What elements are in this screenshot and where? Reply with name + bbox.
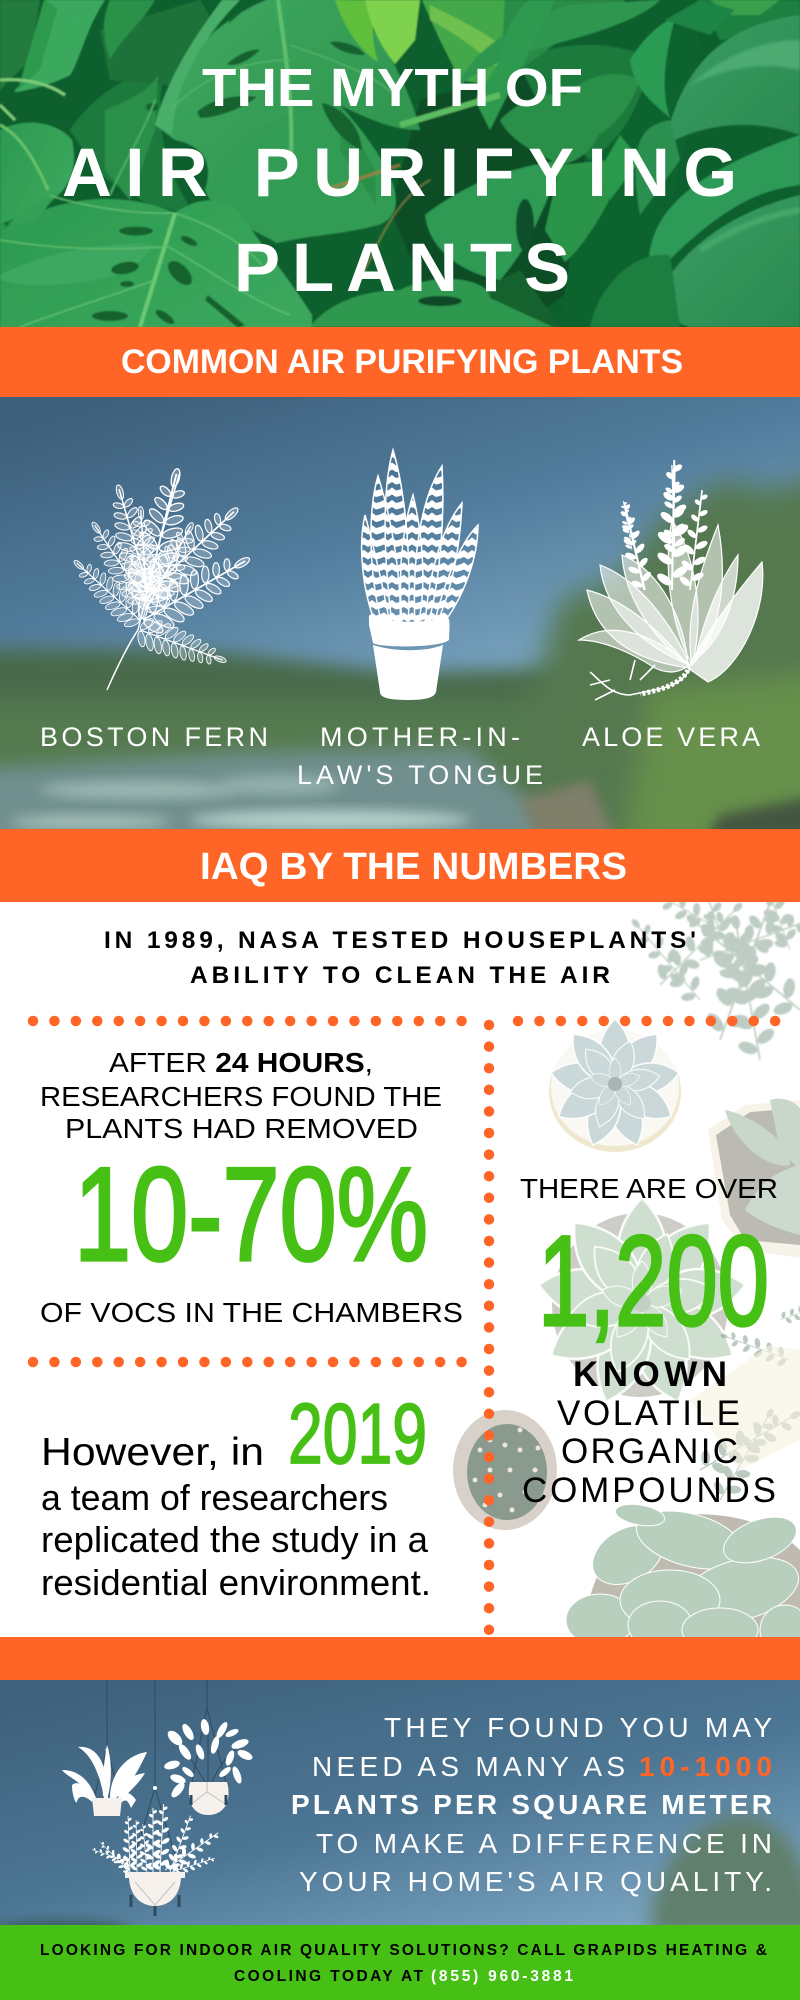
dotted divider: top left [33,1016,475,1026]
footer: call to action: LOOKING FOR INDOOR AIR QUALITY SOLUTIONS? CALL GRAPIDS HEATING & [40,1942,767,1959]
text block: plants per square meter: THEY FOUND YOU MAY [384,1712,772,1743]
text block: plants per square meter [291,1712,772,1897]
plant: hanging vine [163,1680,254,1815]
icon: white plant pot [369,614,450,700]
divider band: orange [0,1637,800,1680]
title: THE MYTH OF [202,58,583,118]
icon: boston fern [63,463,261,690]
panel: plants per square meter backdrop [0,1680,800,1925]
text block: plants per square meter: YOUR HOME'S AIR QUALITY. [299,1866,772,1897]
text block: there are over: THERE ARE OVER [520,1173,778,1204]
text block: of vocs: OF VOCS IN THE CHAMBERS [40,1297,463,1328]
plant name: mother-in-law's tongue: LAW'S TONGUE [297,760,543,790]
title: PLANTS [234,229,570,306]
decor: foliage top right [621,857,800,1064]
stat: 2019: 2019 [288,1387,427,1482]
text block: however in 2019: residential environment. [41,1562,431,1603]
text block: after 24 hours: AFTER 24 HOURS , [109,1047,373,1078]
icon: mother-in-law's tongue [362,450,478,700]
dotted divider: vertical [484,1025,494,1636]
text block: nasa intro: IN 1989, NASA TESTED HOUSEPLANTS' [104,927,696,954]
text block: plants per square meter: TO MAKE A DIFFERENCE IN [316,1828,772,1859]
text block: however in 2019: However, in [41,1431,264,1474]
text block: after 24 hours: RESEARCHERS FOUND THE [40,1081,442,1112]
text block: known volatile organic compounds: VOLATILE [557,1394,740,1433]
text block: known volatile organic compounds: COMPOUNDS [522,1471,776,1510]
decor: blue-green rosette [548,1019,682,1152]
plant name: boston fern: BOSTON FERN [40,722,268,752]
text block: however in 2019: replicated the study in a [41,1519,429,1560]
footer: call to action: (855) 960-3881 [431,1968,573,1985]
section heading: common air purifying plants [0,327,800,397]
section heading: common air purifying plants: COMMON AIR PURIFYING PLANTS [121,343,683,381]
decor: jade plant [566,1501,800,1655]
plant name: mother-in-law's tongue [297,722,543,790]
text block: known volatile organic compounds: KNOWN [573,1355,727,1394]
title: AIR PURIFYING [62,134,737,211]
plant name: aloe vera: ALOE VERA [582,722,760,752]
text block: nasa intro [104,927,696,989]
text block: nasa intro: ABILITY TO CLEAN THE AIR [190,962,610,989]
text block: known volatile organic compounds [522,1355,776,1510]
text block: after 24 hours: PLANTS HAD REMOVED [65,1113,418,1144]
header photo: monstera leaves [0,0,800,327]
text block: after 24 hours [40,1047,442,1144]
decor: cactus [453,1410,557,1530]
decor: pot right [708,1099,800,1258]
plant: peace lily [62,1680,147,1816]
section heading: IAQ by the numbers: IAQ BY THE NUMBERS [200,846,627,888]
title [62,58,737,306]
text block: however in 2019: a team of researchers [41,1477,388,1518]
text block: plants per square meter: NEED AS MANY AS [312,1751,625,1782]
icon: hanging plants [62,1680,254,1916]
text block: known volatile organic compounds: ORGANIC [561,1432,738,1471]
stat: 10-70%: 10-70% [74,1141,428,1289]
plant name: mother-in-law's tongue: MOTHER-IN- [320,722,520,752]
panel: white numbers section backdrop [453,902,800,1637]
icon: aloe vera [579,460,763,700]
footer: call to action: COOLING TODAY AT [234,1968,424,1985]
text block: however in 2019 [41,1387,431,1603]
plant: hanging fern [90,1680,223,1916]
decor: green rosette [534,1198,750,1410]
panel: common plants backdrop [0,397,800,829]
text block: plants per square meter: 10-1000 [639,1751,772,1782]
decor: right sprigs [692,1295,800,1508]
text block: plants per square meter: PLANTS PER SQUARE METER [291,1789,772,1820]
dotted divider: middle left [33,1357,475,1367]
section heading: IAQ by the numbers [0,829,800,902]
dotted divider: top right [518,1016,780,1026]
footer: call to action [0,1925,800,2000]
